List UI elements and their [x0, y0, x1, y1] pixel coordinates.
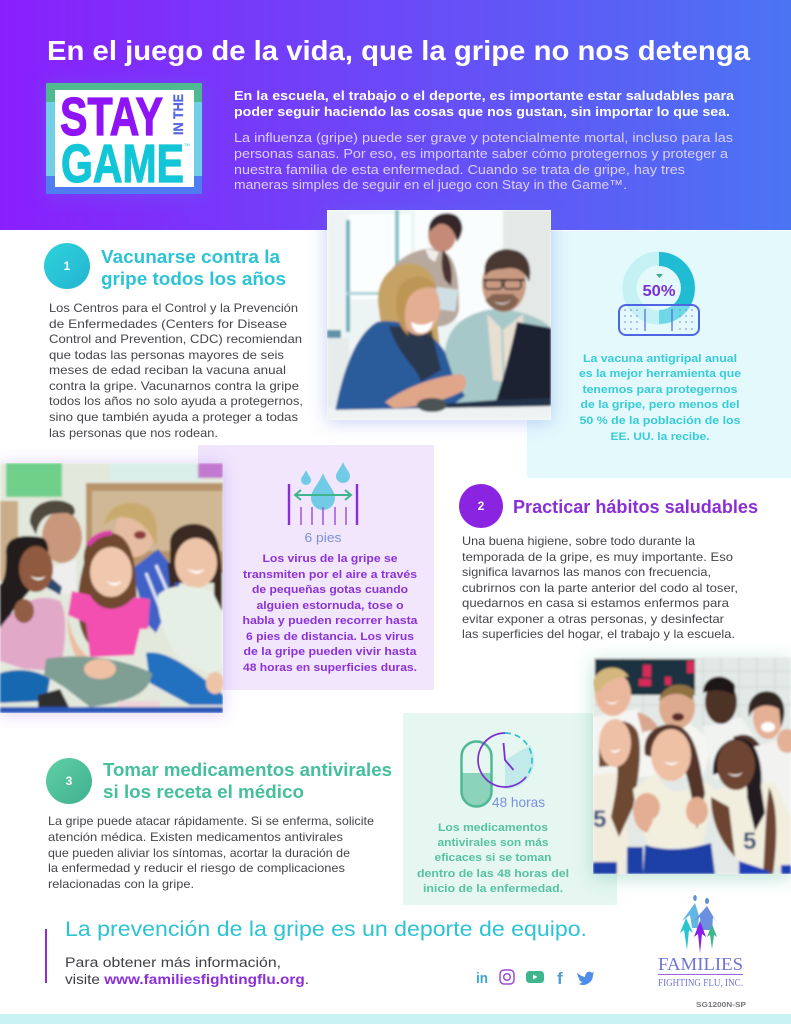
body text 2: evitar exponer a otras personas, y desinfectar [462, 613, 724, 626]
body text 3 [48, 815, 374, 891]
vaccine stat text [579, 353, 741, 443]
body text 1: las personas que nos rodean. [49, 427, 218, 440]
body text 1: sino que también ayuda a proteger a todas [49, 411, 298, 424]
vaccine stat text: es la mejor herramienta que [579, 368, 741, 380]
body text 2: temporada de la gripe, es muy importante. Eso [462, 551, 733, 564]
body text 3: La gripe puede atacar rápidamente. Si se enferma, solicite [48, 815, 374, 828]
body text 1: de Enfermedades (Centers for Disease [49, 318, 287, 331]
droplet text: Los virus de la gripe se [262, 553, 398, 565]
more information: visite www.familiesfightingflu.org . [65, 972, 309, 987]
antiviral text: eficaces si se toman [434, 852, 552, 864]
logo: Stay in the Game: TM [184, 142, 190, 147]
body text 3: atención médica. Existen medicamentos antivirales [48, 831, 343, 844]
intro bold text: poder seguir haciendo las cosas que nos gustan, sin importar lo que sea. [234, 104, 730, 119]
photo: children sitting [0, 463, 224, 713]
section 2 [459, 484, 758, 641]
body text 2: cubrirnos con la parte anterior del codo al toser, [462, 582, 738, 595]
droplet text: de pequeñas gotas cuando [252, 584, 408, 596]
intro paragraph: nuestra familia de esta enfermedad. Cuando se trata de gripe, hay tres [234, 162, 685, 177]
bottom bar [0, 1014, 791, 1024]
body text 2: quedarnos en casa si estamos enfermos para [462, 597, 730, 610]
droplet text [242, 553, 418, 674]
logo: Stay in the Game: IN THE [170, 94, 186, 135]
heading 1: gripe todos los años [101, 268, 286, 289]
heading 3 [103, 759, 392, 802]
intro paragraph: La influenza (gripe) puede ser grave y potencialmente mortal, incluso para las [234, 130, 733, 145]
photo: volleyball team: 5 [593, 806, 606, 833]
intro bold text [234, 88, 735, 119]
body text 2: Una buena higiene, sobre todo durante la [462, 535, 696, 548]
title: En el juego de la vida, que la gripe no nos detenga [47, 35, 750, 66]
antiviral text: inicio de la enfermedad. [423, 883, 563, 895]
body text 1: todos los años no solo ayuda a protegernos, [49, 395, 303, 408]
body text 2 [462, 535, 738, 641]
panel: antiviral timing [403, 713, 617, 905]
icon: twitter [577, 972, 594, 985]
header band [0, 0, 791, 230]
vaccine stat text: EE. UU. la recibe. [610, 431, 710, 443]
photo: volleyball team: 5 [743, 828, 756, 855]
photo: office coworkers laughing [327, 210, 551, 420]
icon: donut and bandage: 50% [642, 283, 676, 300]
panel: droplet transmission [198, 445, 434, 690]
vaccine stat text: tenemos para protegernos [582, 384, 738, 396]
icon: capsule and clock [462, 733, 534, 806]
social icons [476, 969, 594, 988]
body text 3: que pueden aliviar los síntomas, acortar la duración de [48, 847, 350, 860]
droplet text: 6 pies de distancia. Los virus [246, 631, 414, 643]
body text 3: la enfermedad y reducir el riesgo de complicaciones [48, 862, 345, 875]
droplet text: 48 horas en superficies duras. [243, 662, 417, 674]
body text 1: meses de edad reciban la vacuna anual [49, 364, 286, 377]
body text 1: que todas las personas mayores de seis [49, 349, 284, 362]
more information: Para obtener más información, [65, 955, 281, 970]
antiviral text: antivirales son más [438, 837, 548, 849]
body text 1: contra la gripe. Vacunarnos contra la gripe [49, 380, 299, 393]
heading 2: Practicar hábitos saludables [513, 496, 758, 517]
droplet text: transmiten por el aire a través [243, 569, 417, 581]
icon: linkedin: in [476, 970, 488, 987]
icon: droplets six feet [289, 462, 357, 525]
logo: Families Fighting Flu: FAMILIES [658, 954, 743, 974]
icon: facebook: f [557, 969, 563, 988]
heading 3: Tomar medicamentos antivirales [103, 759, 392, 780]
droplet text: alguien estornuda, tose o [256, 600, 404, 612]
heading 3: si los receta el médico [103, 781, 304, 802]
number badge 1 [44, 243, 90, 289]
photo: volleyball team [593, 657, 791, 874]
body text 1: Control and Prevention, CDC) recomiendan [49, 333, 302, 346]
logo: Families Fighting Flu [658, 895, 743, 989]
intro paragraph: maneras simples de seguir en el juego con Stay in the Game™. [234, 177, 627, 192]
intro bold text: En la escuela, el trabajo o el deporte, es importante estar saludables para [234, 88, 735, 103]
antiviral text [417, 822, 569, 895]
document code: SG1200N-SP [696, 1000, 746, 1009]
heading 1 [101, 246, 286, 289]
droplet text: de la gripe pueden vivir hasta [244, 646, 417, 658]
heading 1: Vacunarse contra la [101, 246, 281, 267]
body text 1: Los Centros para el Control y la Prevención [49, 302, 298, 315]
antiviral text: dentro de las 48 horas del [417, 868, 569, 880]
logo: Stay in the Game [46, 83, 202, 194]
intro paragraph [234, 130, 733, 192]
number badge 3 [46, 758, 92, 804]
number badge 3: 3 [66, 774, 73, 788]
logo: Stay in the Game: STAY [60, 87, 163, 147]
icon: instagram [500, 970, 514, 984]
intro paragraph: personas sanas. Por eso, es importante saber cómo protegernos y proteger a [234, 146, 729, 161]
vaccine stat text: 50 % de la población de los [580, 415, 740, 427]
body text 3: relacionadas con la gripe. [48, 878, 194, 891]
body text 2: las superficies del hogar, el trabajo y la escuela. [462, 628, 735, 641]
icon: donut and bandage [619, 252, 699, 335]
number badge 2: 2 [478, 499, 485, 513]
label: 6 pies: 6 pies [304, 530, 342, 545]
droplet text: habla y pueden recorrer hasta [242, 615, 418, 627]
icon: youtube [526, 971, 544, 983]
vaccine stat text: de la gripe, pero menos del [580, 399, 740, 411]
footer [45, 918, 587, 987]
antiviral text: Los medicamentos [438, 822, 548, 834]
footer slogan: La prevención de la gripe es un deporte de equipo. [65, 918, 587, 941]
section 1 [44, 243, 303, 440]
section 3 [46, 758, 392, 891]
vaccine stat text: La vacuna antigripal anual [583, 353, 737, 365]
body text 1 [49, 302, 303, 440]
label: 48 horas: 48 horas [492, 794, 545, 810]
body text 2: significa lavarnos las manos con frecuencia, [462, 566, 711, 579]
logo: Stay in the Game: GAME [61, 134, 184, 194]
panel: vaccine stat [527, 231, 791, 478]
logo: Families Fighting Flu: FIGHTING FLU, INC. [658, 977, 743, 989]
number badge 1: 1 [64, 259, 71, 273]
number badge 2 [459, 484, 503, 528]
more information [65, 955, 309, 987]
